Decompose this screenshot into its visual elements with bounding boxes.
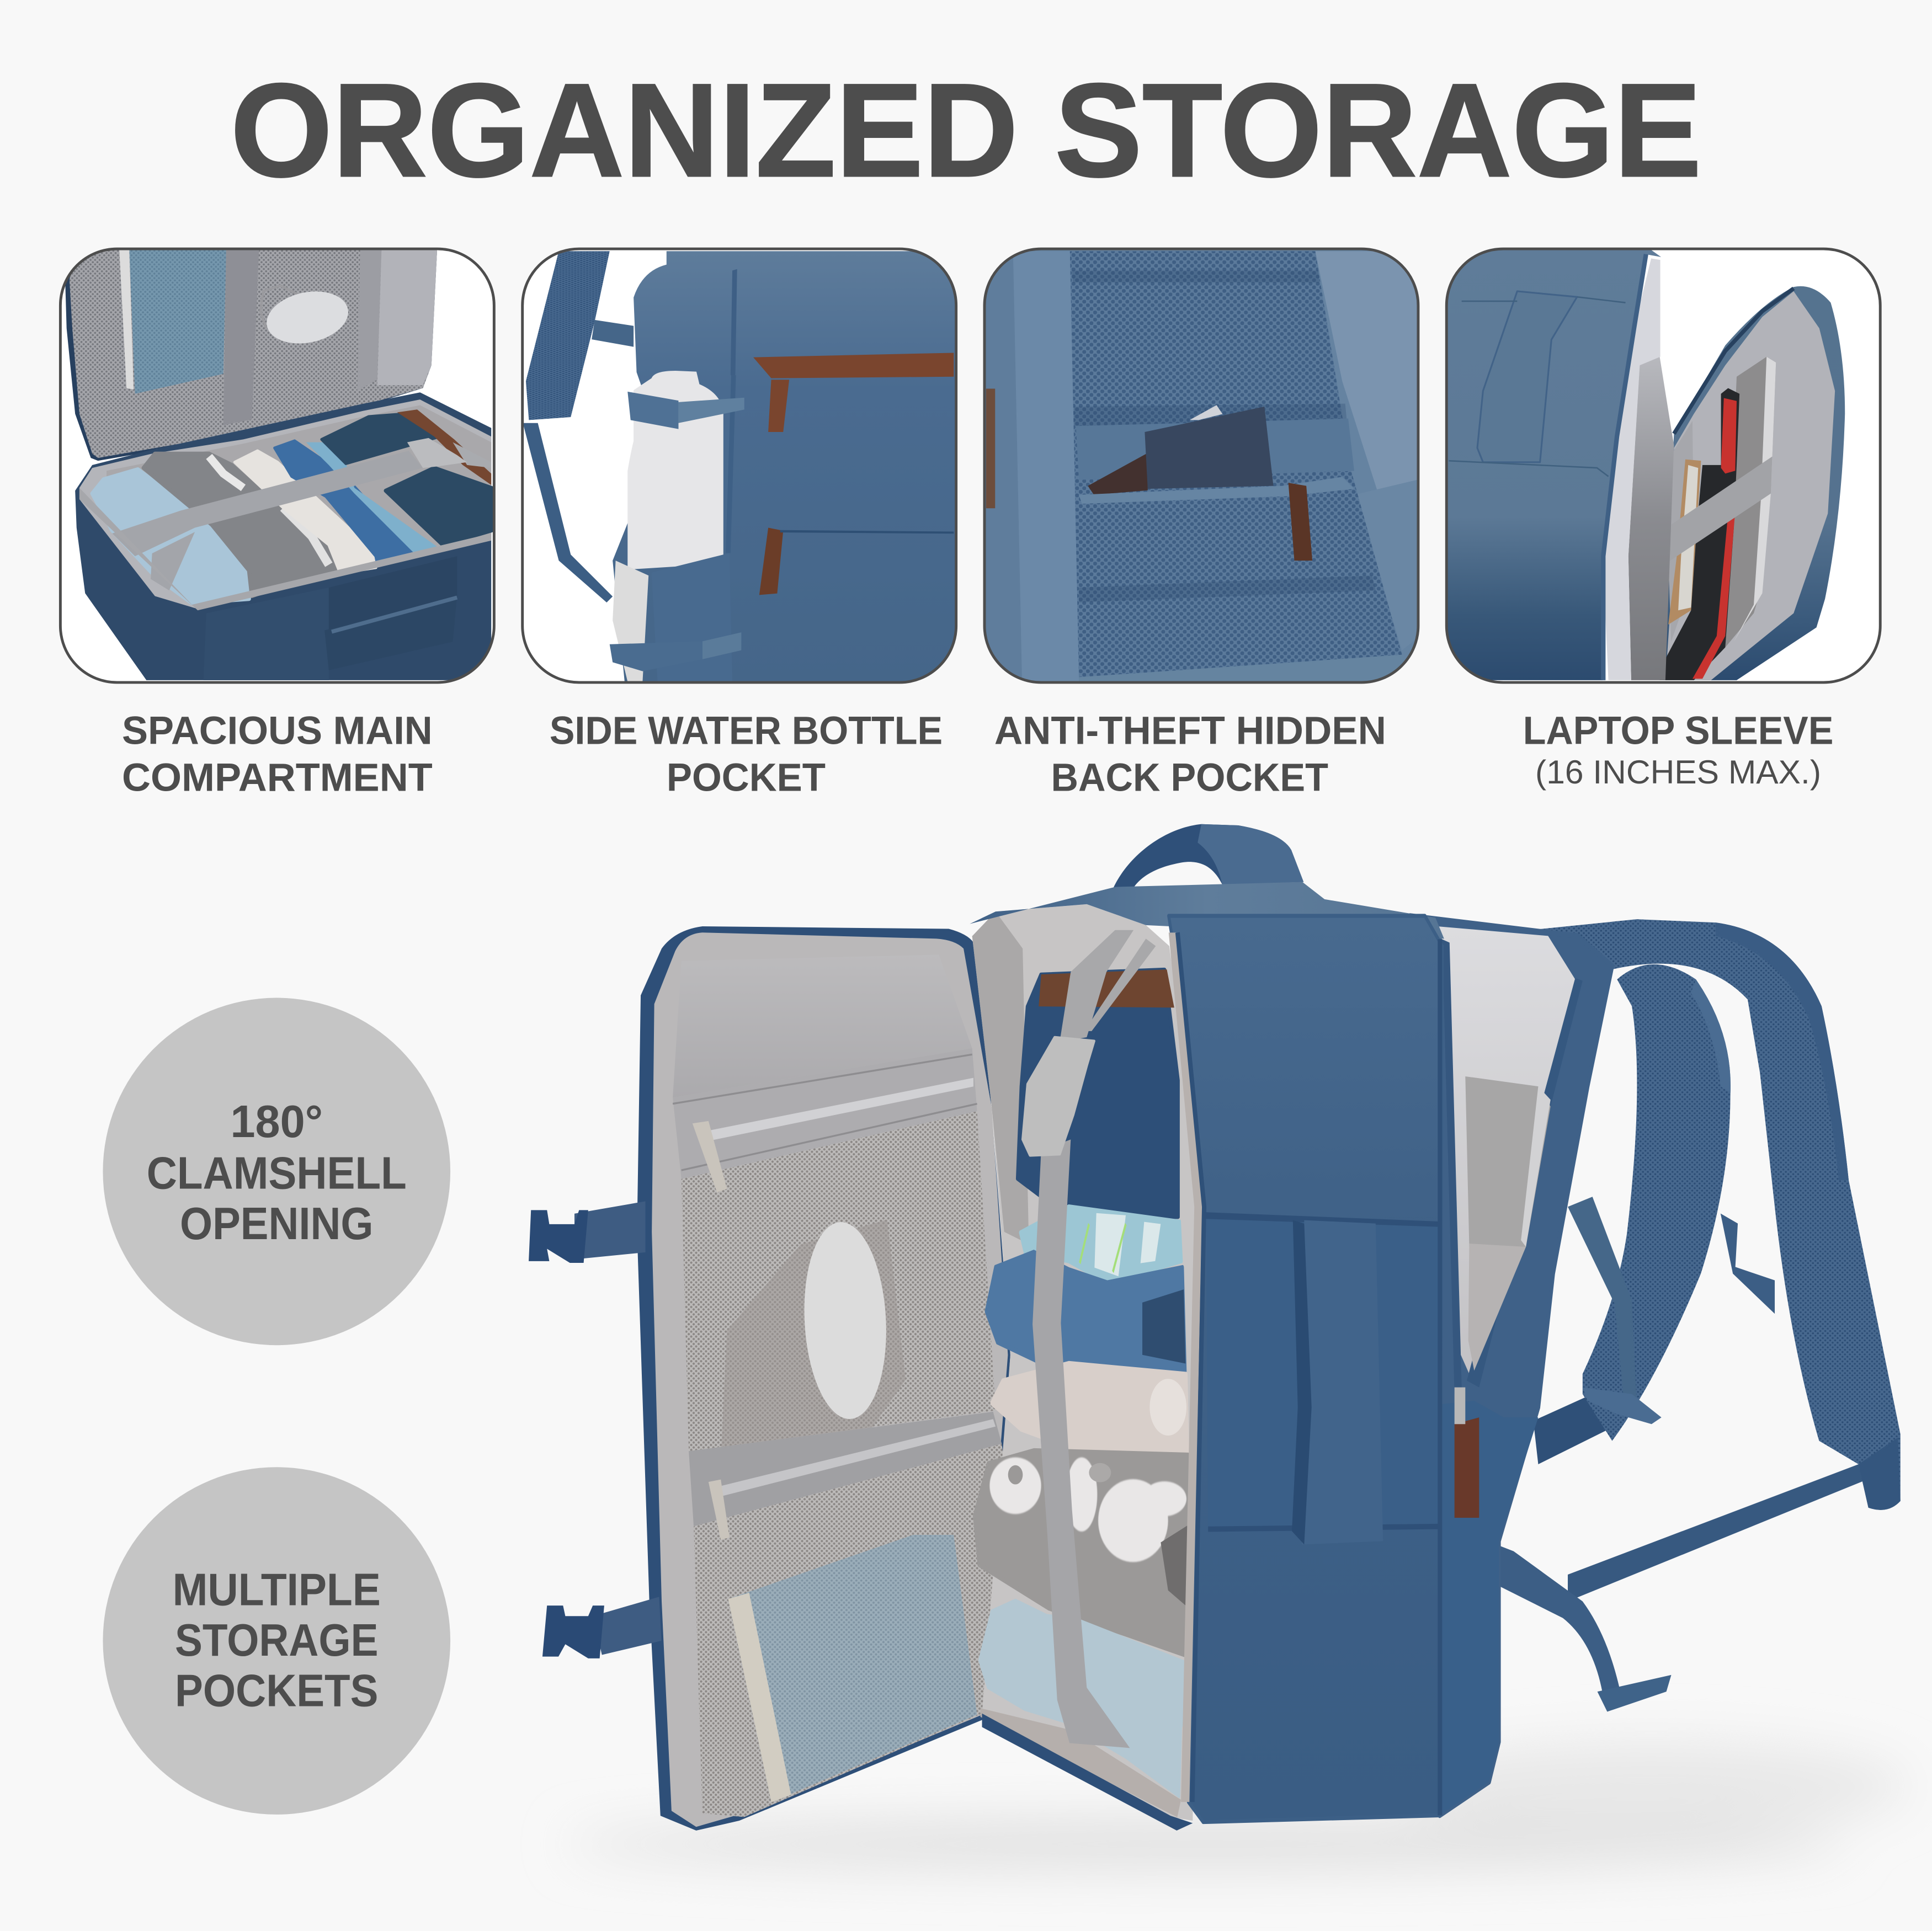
inner lining [1628,357,1674,680]
badge: multiple storage pockets: MULTIPLE [173,1564,381,1615]
lower side section [1440,1401,1538,1815]
bottom navy trim [982,1714,1193,1831]
main backpack illustration [529,824,1910,1869]
silk top area [673,954,972,1097]
light blue sweater [980,1601,1188,1795]
mesh pocket [610,553,741,682]
black folder with red edge [1660,388,1739,680]
label: spacious main compartment: SPACIOUS MAIN [122,709,433,753]
laptop in sleeve [1465,1076,1551,1370]
badge: multiple storage pockets: STORAGE [175,1614,378,1666]
upper buckle [529,1210,588,1263]
water bottle [627,371,723,569]
bottle strap upper with buckle [627,392,744,429]
outer shoulder strap [1538,919,1901,1510]
label: laptop sleeve: LAPTOP SLEEVE [1523,709,1833,753]
striped shirt [1020,1207,1182,1283]
bottom fabric [1079,655,1417,682]
front rim [79,488,491,610]
badge: multiple storage pockets: POCKETS [175,1665,378,1716]
zipper pull [1289,483,1312,561]
lower webbing strap [1497,1394,1864,1712]
top handle [1477,291,1577,462]
compression strap and buckle [112,438,491,590]
zipper pull [1455,1388,1479,1518]
label: side water bottle pocket: SIDE WATER BOTTLE [550,709,943,753]
cream sweater [992,1364,1188,1464]
bag base [75,392,491,680]
badge: multiple storage pockets [103,1467,450,1815]
pocket flap [1079,477,1354,504]
panel: laptop sleeve [1446,249,1880,682]
badge: 180 clamshell opening [103,998,450,1345]
upper strap [574,1201,646,1260]
zipper edge [1603,254,1646,680]
notebook [1668,460,1701,625]
denim [986,1252,1185,1374]
badge: 180 clamshell opening: CLAMSHELL [147,1148,407,1199]
label: laptop sleeve: (16 INCHES MAX.) [1535,753,1821,791]
side release buckles [529,1201,646,1263]
lower strap [593,1597,662,1655]
panel: side water bottle pocket [523,249,957,682]
badge: 180 clamshell opening: OPENING [180,1198,374,1249]
side carry handle [1292,1220,1383,1544]
shoulder strap [523,251,634,602]
panel: anti-theft hidden back pocket [984,249,1418,682]
label: spacious main compartment [122,709,433,799]
left clamshell flap [637,926,1014,1831]
adjuster straps [1568,1197,1775,1424]
lower zipper band [689,1412,1002,1540]
compression strap and buckle [1023,930,1156,1748]
packing cube [1018,969,1178,1217]
lining of laptop compartment [1432,926,1583,1394]
label: anti-theft hidden back pocket: ANTI-THEFT HIDDEN [994,709,1386,753]
folded clothes stack [974,1207,1188,1817]
flap lining rim [652,932,1008,1827]
webbing band [1076,419,1354,480]
label: laptop sleeve [1523,709,1833,791]
open lid [65,250,437,461]
notebook behind mesh [728,1535,977,1802]
label: side water bottle pocket [550,709,943,799]
side fabric bands [984,251,1417,682]
upper mesh pocket [682,1111,996,1460]
inner shoulder strap [1583,964,1731,1441]
notebooks in pocket [1088,405,1274,495]
open laptop flap [1663,286,1845,680]
retaining strap [1643,456,1773,579]
laptop [1725,357,1776,647]
main compartment interior [972,904,1201,1831]
white inner rim [1603,258,1660,680]
badge: 180 clamshell opening: 180° [231,1096,323,1147]
label: anti-theft hidden back pocket [994,709,1386,799]
upper zipper band [673,1048,977,1192]
silver lining strip [1169,932,1202,1802]
panel: spacious main compartment [60,249,494,682]
label: spacious main compartment: COMPARTMENT [122,755,433,799]
bag body [613,251,957,682]
front side panel with handle [1169,916,1442,1822]
bottom lining [981,1708,1181,1817]
patterned gray sweater [974,1451,1188,1656]
main side panel [1169,916,1442,1822]
label: side water bottle pocket: POCKET [667,755,826,799]
label: anti-theft hidden back pocket: BACK POCKET [1051,755,1328,799]
seams and brown trim [726,269,954,595]
top carry handle [1113,824,1303,892]
lower mesh pocket [694,1444,1014,1817]
ground shadow [567,1742,1910,1869]
panel seams [1203,939,1442,1815]
title: ORGANIZED STORAGE [231,56,1701,205]
back panel of body [1410,916,1612,1815]
body seams [1449,297,1626,477]
zipper edge band [1178,932,1204,1802]
flap outer shell [637,926,1010,1831]
shoulder straps and webbing [1497,919,1901,1712]
back mesh [1070,251,1402,677]
rolled clothes [92,409,491,603]
lower buckle [542,1605,604,1658]
bag back body [1446,250,1661,680]
top surface of bag [970,882,1444,938]
